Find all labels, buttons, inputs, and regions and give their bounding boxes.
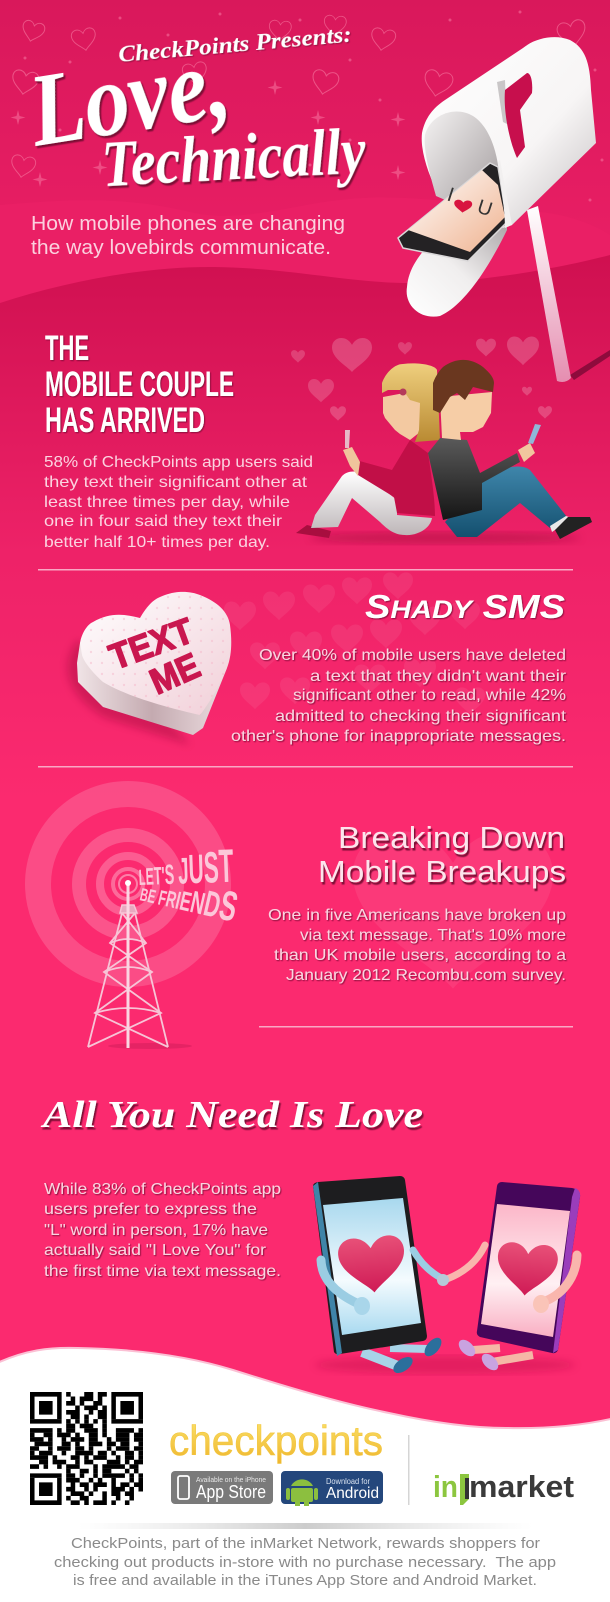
phone in mailbox bbox=[398, 163, 507, 261]
candy text: ME bbox=[144, 645, 206, 702]
footer shadow bar bbox=[78, 1523, 533, 1529]
icon: signal rings bbox=[38, 794, 218, 974]
heading: shady sms: SHADY SMS bbox=[365, 588, 565, 625]
badge: android bbox=[281, 1471, 383, 1506]
heading: breaking down mobile breakups: Breaking Down bbox=[338, 820, 565, 855]
badge: android: Android bbox=[326, 1485, 379, 1502]
divider bbox=[38, 569, 573, 570]
icon: android robot bbox=[286, 1479, 318, 1506]
title line: Love: Love, bbox=[21, 24, 237, 169]
badge: app store bbox=[171, 1471, 273, 1504]
text block: breakups: One in five Americans have broken up bbox=[268, 907, 566, 924]
white footer wave bbox=[0, 1348, 610, 1602]
footer text: CheckPoints, part of the inMarket Network, rewards shoppers for bbox=[71, 1536, 540, 1552]
text block: breakups: than UK mobile users, according to a bbox=[274, 947, 566, 964]
logo: inmarket: in bbox=[433, 1469, 458, 1504]
illustration: two phones holding hands bbox=[313, 1176, 580, 1376]
badge: android: Download for bbox=[326, 1477, 370, 1486]
badge: app store: Available on the iPhone bbox=[196, 1477, 266, 1484]
footer text: checking out products in-store with no purchase necessary. The app bbox=[54, 1555, 556, 1571]
decorative hearts and sparkles bbox=[9, 10, 604, 202]
divider bbox=[38, 766, 573, 768]
QR code bbox=[30, 1394, 143, 1503]
text block: all you need is love bbox=[44, 1181, 281, 1280]
logo: checkpoints: checkpoints bbox=[169, 1417, 383, 1464]
footer text bbox=[54, 1536, 556, 1589]
heading: all you need is love: All You Need Is Love bbox=[41, 1094, 423, 1136]
heading: the mobile couple has arrived bbox=[45, 329, 234, 440]
text block: breakups bbox=[268, 907, 566, 984]
phone in mailbox: I bbox=[444, 184, 457, 206]
text block: shady sms: significant other to read, while 42% bbox=[293, 687, 566, 704]
text block: all you need is love: While 83% of CheckPoints app bbox=[44, 1181, 281, 1198]
text block: shady sms bbox=[231, 647, 567, 745]
text: let's just be friends: LET'S JUST bbox=[137, 839, 234, 895]
heading: breaking down mobile breakups bbox=[318, 820, 566, 889]
heading: the mobile couple has arrived: THE bbox=[45, 329, 89, 368]
text block: mobile couple: better half 10+ times per day. bbox=[44, 534, 270, 551]
blue phone bbox=[313, 1176, 445, 1376]
faint hearts behind shady sms bbox=[224, 572, 485, 714]
girl bbox=[296, 363, 440, 538]
text block: shady sms: Over 40% of mobile users have deleted bbox=[259, 647, 566, 664]
subtitle: the way lovebirds communicate. bbox=[31, 237, 331, 259]
text: let's just be friends: BE FRIENDS bbox=[137, 863, 242, 931]
title line: CheckPoints Presents: CheckPoints Presents: bbox=[117, 22, 353, 67]
text: let's just be friends bbox=[137, 839, 242, 931]
text block: all you need is love: "L" word in person, 17% have bbox=[44, 1222, 268, 1239]
heading: the mobile couple has arrived: MOBILE COUPLE bbox=[45, 365, 234, 404]
title bbox=[21, 22, 368, 201]
purple phone bbox=[437, 1182, 580, 1373]
heading: breaking down mobile breakups: Mobile Breakups bbox=[318, 854, 566, 889]
heading: the mobile couple has arrived: HAS ARRIVED bbox=[45, 401, 205, 440]
text block: shady sms: admitted to checking their significant bbox=[275, 708, 567, 725]
text block: breakups: January 2012 Recombu.com survey. bbox=[286, 967, 566, 984]
text block: mobile couple: least three times per day, while bbox=[44, 494, 290, 511]
boy bbox=[428, 360, 592, 539]
illustration: couple back to back bbox=[296, 360, 592, 544]
text block: mobile couple: 58% of CheckPoints app users said bbox=[44, 454, 313, 471]
text block: shady sms: a text that they didn't want their bbox=[310, 668, 567, 685]
text block: breakups: via text message. That's 10% more bbox=[300, 927, 566, 944]
text block: mobile couple bbox=[44, 454, 313, 551]
title line: Technically: Technically bbox=[100, 114, 368, 201]
phone in mailbox: U bbox=[474, 196, 495, 221]
text block: shady sms: other's phone for inappropriate messages. bbox=[231, 728, 566, 745]
divider bbox=[408, 1435, 410, 1505]
subtitle: How mobile phones are changing bbox=[31, 213, 345, 235]
text block: mobile couple: they text their significant other at bbox=[44, 474, 308, 491]
candy text: TEXT bbox=[104, 610, 199, 678]
badge: app store: App Store bbox=[196, 1482, 266, 1502]
floating hearts near couple bbox=[291, 337, 552, 421]
logo: inmarket: market bbox=[469, 1469, 574, 1504]
icon: candy heart text me bbox=[67, 592, 231, 745]
faint large heart bbox=[353, 831, 553, 989]
text block: mobile couple: one in four said they text their bbox=[44, 513, 283, 530]
text block: all you need is love: the first time via text message. bbox=[44, 1263, 281, 1280]
footer text: is free and available in the iTunes App Store and Android Market. bbox=[73, 1573, 537, 1589]
icon: radio tower bbox=[88, 880, 192, 1049]
text block: all you need is love: actually said "I Love You" for bbox=[44, 1242, 267, 1259]
text block: all you need is love: users prefer to express the bbox=[44, 1201, 257, 1218]
icon: mailbox with phone bbox=[398, 37, 610, 382]
subtitle bbox=[31, 213, 345, 259]
divider bbox=[259, 1026, 573, 1028]
